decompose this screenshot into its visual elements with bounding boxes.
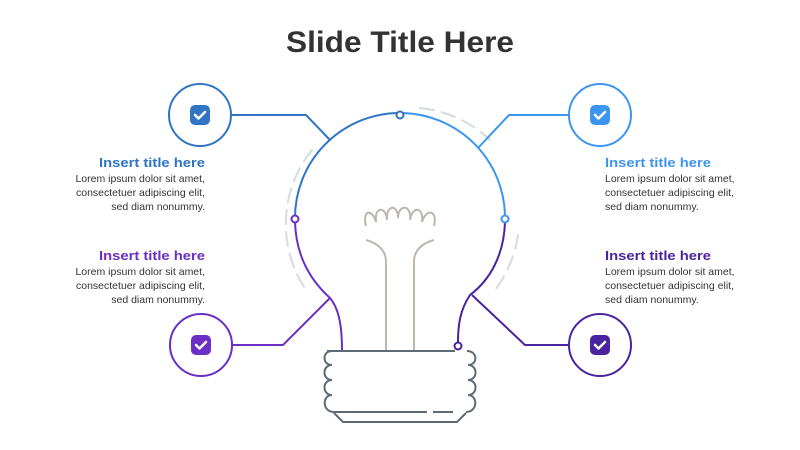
text block top-left: sed diam nonummy. bbox=[111, 201, 205, 213]
text block top-left: Insert title here bbox=[99, 155, 205, 170]
title: Slide Title Here bbox=[286, 26, 514, 59]
text block top-left bbox=[75, 155, 205, 213]
text block bottom-left: Insert title here bbox=[99, 248, 205, 263]
text block top-right bbox=[605, 155, 735, 213]
icon: check circle top-left bbox=[169, 84, 231, 146]
text block bottom-left: consectetuer adipiscing elit, bbox=[76, 280, 205, 292]
item: bottom-left bbox=[75, 248, 330, 376]
bulb illustration bbox=[286, 108, 518, 422]
bulb glass outline bbox=[292, 112, 508, 350]
icon: check circle bottom-left bbox=[170, 314, 232, 376]
item: top-right bbox=[478, 84, 735, 213]
text block bottom-right: Lorem ipsum dolor sit amet, bbox=[605, 266, 735, 278]
screw base bbox=[324, 351, 476, 422]
text block top-right: consectetuer adipiscing elit, bbox=[605, 187, 734, 199]
text block top-right: Insert title here bbox=[605, 155, 711, 170]
text block bottom-right: consectetuer adipiscing elit, bbox=[605, 280, 734, 292]
text block bottom-right bbox=[605, 248, 735, 306]
filament bbox=[365, 208, 435, 350]
text block top-left: Lorem ipsum dolor sit amet, bbox=[75, 173, 205, 185]
dashed glow arcs bbox=[286, 108, 518, 290]
icon: check circle bottom-right bbox=[569, 314, 631, 376]
item: top-left bbox=[75, 84, 330, 213]
icon: check circle top-right bbox=[569, 84, 631, 146]
text block bottom-left bbox=[75, 248, 205, 306]
text block top-right: sed diam nonummy. bbox=[605, 201, 699, 213]
text block bottom-left: Lorem ipsum dolor sit amet, bbox=[75, 266, 205, 278]
item: bottom-right bbox=[472, 248, 735, 376]
text block top-left: consectetuer adipiscing elit, bbox=[76, 187, 205, 199]
text block bottom-right: Insert title here bbox=[605, 248, 711, 263]
text block bottom-left: sed diam nonummy. bbox=[111, 294, 205, 306]
text block bottom-right: sed diam nonummy. bbox=[605, 294, 699, 306]
text block top-right: Lorem ipsum dolor sit amet, bbox=[605, 173, 735, 185]
